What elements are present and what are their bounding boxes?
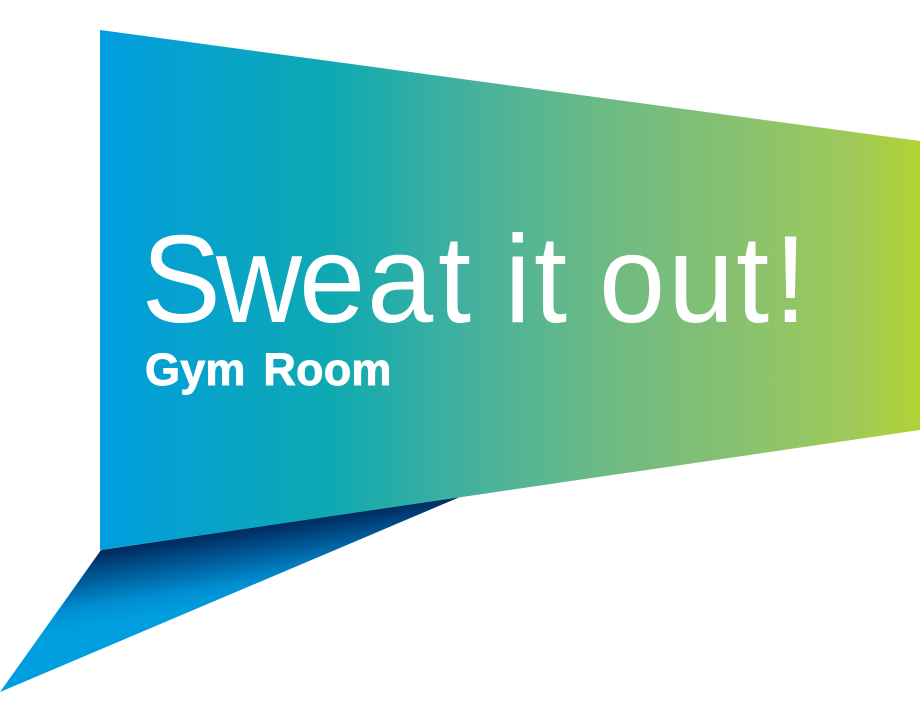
fold tail xyxy=(0,497,460,692)
title: Sweat it out! xyxy=(142,210,807,349)
subtitle: Gym Room xyxy=(145,344,392,395)
main banner panel xyxy=(100,30,920,550)
